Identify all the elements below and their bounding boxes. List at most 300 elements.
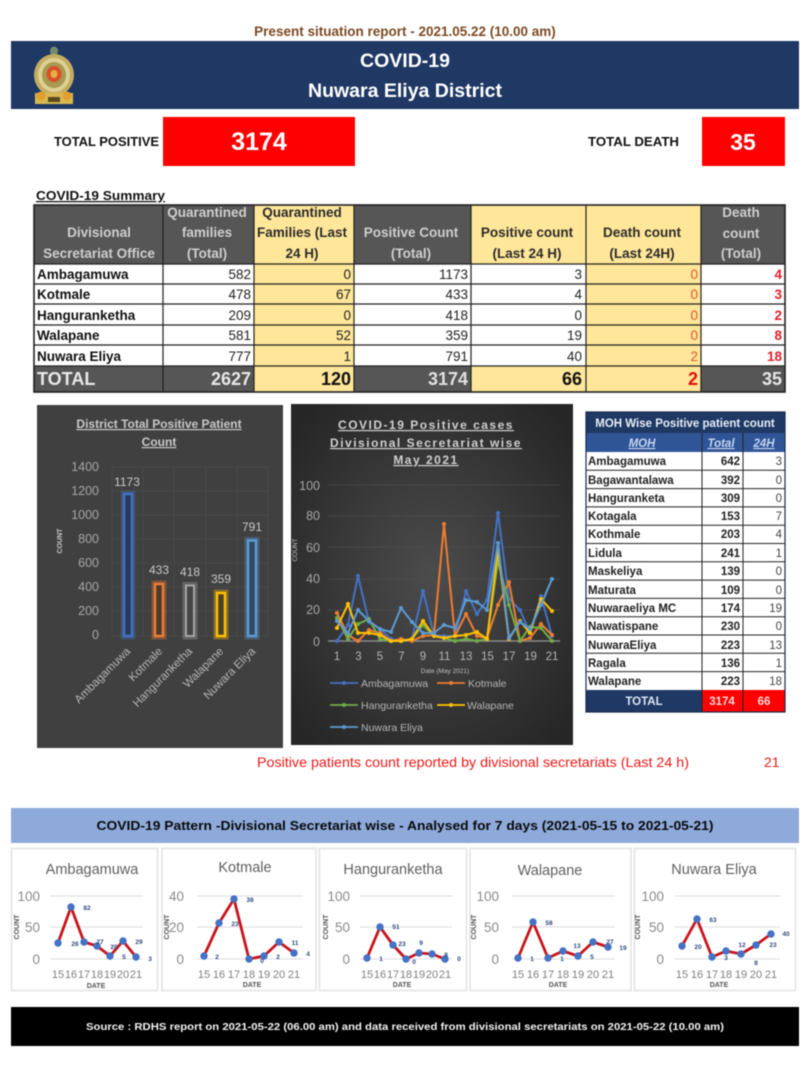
small chart: Kotmale: 2: [276, 954, 280, 961]
panel: MOH table: [586, 412, 785, 712]
chart title: Count: [142, 435, 176, 449]
legend: Hanguranketha: [361, 700, 433, 712]
x axis labels: 19: [524, 651, 537, 663]
MOH rows: Bagawantalawa: [588, 475, 674, 487]
row: Nuwara Eliya: 18: [767, 349, 782, 364]
small chart: Ambagamuwa: COUNT: [14, 914, 21, 939]
panel: divisional line chart: [291, 404, 573, 745]
MOH column headers: MOH: [629, 438, 656, 450]
header row: Death: [722, 205, 760, 220]
header row: [43, 205, 761, 261]
small chart: Kotmale: 38: [246, 897, 254, 904]
small chart: Kotmale: 0: [260, 958, 264, 965]
KPI: total positive: [54, 117, 355, 166]
small chart: Hanguranketha: 19: [413, 969, 425, 981]
row: Ambagamuwa: 0: [343, 267, 351, 282]
row: total: 35: [762, 369, 782, 389]
row: total: 3174: [428, 369, 468, 389]
small chart: Kotmale: 20: [273, 969, 285, 981]
MOH rows: NuwaraEliya: [588, 640, 657, 652]
category labels: Kotmale: [127, 646, 165, 684]
header row: Death count: [603, 225, 681, 240]
section banner: [11, 808, 799, 843]
MOH rows: Lidula: [588, 548, 622, 560]
small chart: Hanguranketha: 8: [444, 952, 448, 959]
header row: (Total): [391, 246, 431, 261]
small chart: Nuwara Eliya: 3: [724, 955, 728, 962]
MOH rows: Nuwaraeliya MC: [588, 603, 676, 615]
y axis title: COUNT: [57, 528, 64, 553]
small chart: Walapane: 21: [602, 969, 614, 981]
MOH column headers: Total: [707, 438, 735, 450]
small chart: Hanguranketha: Hanguranketha: [343, 862, 444, 878]
small chart: Walapane: 58: [545, 920, 553, 927]
small chart: Hanguranketha: [320, 848, 466, 990]
small chart: Walapane: 1: [560, 956, 564, 963]
row: Kotmale: 0: [690, 287, 698, 302]
row: Nuwara Eliya: 40: [567, 349, 582, 364]
small chart: Kotmale: 18: [243, 969, 255, 981]
small chart: Ambagamuwa: [12, 848, 158, 990]
row: Kotmale: 433: [445, 287, 468, 302]
MOH rows: Nawatispane: [588, 621, 658, 633]
small chart: Nuwara Eliya: 100: [641, 889, 664, 904]
small chart: Ambagamuwa: 26: [71, 941, 79, 948]
small chart: Nuwara Eliya: 19: [735, 969, 747, 981]
MOH rows: Maturata: [588, 585, 637, 597]
MOH rows: 174: [721, 603, 741, 615]
small chart: Hanguranketha: 16: [374, 969, 386, 981]
row: total: TOTAL: [37, 369, 95, 389]
MOH rows: Ragala: [588, 658, 626, 670]
header row: (Total): [187, 246, 227, 261]
MOH rows: Ambagamuwa: [588, 456, 667, 468]
MOH rows: 0: [776, 621, 782, 633]
MOH rows: 109: [721, 585, 740, 597]
MOH rows: 223: [721, 640, 740, 652]
report date line: Present situation report - 2021.05.22 (10.00 am): [254, 24, 556, 39]
data labels: 791: [242, 520, 262, 534]
small chart: Ambagamuwa: Ambagamuwa: [46, 862, 139, 878]
fills: [34, 205, 785, 392]
row: Walapane: 52: [336, 328, 351, 343]
small chart: Nuwara Eliya: Nuwara Eliya: [671, 862, 758, 878]
MOH rows: 241: [721, 548, 741, 560]
y axis labels: 20: [306, 603, 320, 617]
MOH rows: 19: [769, 603, 782, 615]
small chart: Kotmale: 20: [169, 920, 184, 935]
small chart: Nuwara Eliya: 12: [738, 942, 746, 949]
row: Hanguranketha: 418: [445, 308, 468, 323]
header row: Positive Count: [364, 225, 459, 240]
MOH rows: 13: [769, 640, 782, 652]
MOH total row: 66: [758, 696, 770, 708]
legend: Nuwara Eliya: [361, 722, 423, 734]
row: Nuwara Eliya: [37, 349, 782, 364]
small chart: Ambagamuwa: 0: [32, 952, 40, 967]
MOH rows: 0: [776, 475, 782, 487]
small chart: Walapane: 16: [527, 969, 539, 981]
small chart: Ambagamuwa: 27: [96, 939, 104, 946]
row: Nuwara Eliya: 777: [228, 349, 251, 364]
row: total: [37, 369, 782, 389]
MOH column headers: [629, 438, 775, 450]
row: Hanguranketha: 2: [774, 308, 782, 323]
MOH rows: 7: [776, 511, 782, 523]
MOH rows: 0: [776, 585, 782, 597]
row: Hanguranketha: 0: [574, 308, 582, 323]
category labels: Ambagamuwa: [73, 645, 134, 706]
legend: Kotmale: [468, 678, 507, 690]
MOH rows: 139: [721, 566, 740, 578]
header banner: [11, 41, 799, 109]
MOH rows: 309: [721, 493, 740, 505]
small chart: Kotmale: Kotmale: [218, 860, 272, 876]
MOH column headers: 24H: [752, 438, 775, 450]
MOH rows: 0: [776, 566, 782, 578]
row: Hanguranketha: [37, 308, 782, 323]
small chart: Ambagamuwa: 3: [148, 956, 152, 963]
small chart: Walapane: [470, 848, 631, 990]
small chart: Hanguranketha: 1: [379, 956, 383, 963]
small chart: Hanguranketha: 17: [387, 969, 399, 981]
legend: Walapane: [467, 700, 514, 712]
header row: Families (Last: [257, 225, 348, 240]
row: Ambagamuwa: 4: [774, 267, 782, 282]
row: Ambagamuwa: 582: [228, 267, 251, 282]
header row: families: [182, 225, 232, 240]
y axis labels: 200: [78, 604, 99, 618]
y axis labels: 400: [78, 580, 99, 594]
small chart: Hanguranketha: 0: [457, 956, 461, 963]
row: Walapane: 8: [774, 328, 782, 343]
small chart: Nuwara Eliya: 17: [706, 969, 718, 981]
MOH rows: Hanguranketa: [588, 493, 665, 505]
chart title: [76, 417, 242, 449]
callout: last 24h count: 21: [764, 754, 780, 770]
small chart: Nuwara Eliya: DATE: [710, 982, 729, 989]
bars: [124, 494, 256, 636]
header row: 24 H): [285, 246, 319, 261]
footer source bar: Source : RDHS report on 2021-05-22 (06.00 am) and data received from divisional secretariats on 2021-05-22 (10.00 am): [86, 1021, 724, 1033]
y axis labels: 60: [306, 541, 320, 555]
header row: (Last 24 H): [492, 246, 562, 261]
MOH rows: 223: [721, 676, 740, 688]
small chart: Hanguranketha: 50: [335, 920, 350, 935]
y axis labels: 1000: [71, 508, 99, 522]
small chart: Nuwara Eliya: COUNT: [635, 914, 642, 939]
header row: count: [723, 226, 760, 241]
y axis labels: 0: [313, 635, 320, 649]
x axis labels: 21: [546, 651, 558, 663]
small chart: Walapane: 0: [491, 952, 499, 967]
MOH rows: 4: [776, 529, 783, 541]
series: Nuwara Eliya: [337, 543, 552, 638]
y axis labels: 600: [78, 556, 99, 570]
small chart: Walapane: 50: [484, 920, 499, 935]
row: Ambagamuwa: 0: [690, 267, 698, 282]
small chart: Walapane: 1: [530, 956, 534, 963]
row: Kotmale: 478: [228, 287, 251, 302]
small chart: Walapane: 27: [606, 939, 614, 946]
small chart: Kotmale: 23: [231, 921, 239, 928]
x axis labels: 3: [355, 651, 362, 663]
y axis title: COUNT: [292, 538, 299, 562]
row: Hanguranketha: 0: [343, 308, 351, 323]
small chart: Kotmale: 11: [292, 940, 299, 947]
MOH rows: 392: [721, 475, 740, 487]
small chart: Walapane: 18: [557, 969, 569, 981]
data labels: 1173: [114, 475, 140, 489]
small chart: Nuwara Eliya: 8: [754, 960, 758, 967]
small chart: Ambagamuwa: 20: [117, 969, 129, 981]
small chart: Hanguranketha: 21: [439, 969, 451, 981]
row: Ambagamuwa: [37, 267, 782, 282]
small chart: Kotmale: 16: [213, 969, 225, 981]
small chart: Hanguranketha: 0: [342, 952, 350, 967]
KPI: total death: [588, 117, 785, 166]
small chart: Hanguranketha: 23: [398, 941, 406, 948]
small chart: Hanguranketha: COUNT: [323, 914, 330, 939]
chart title: COVID-19 Positive cases: [338, 418, 514, 432]
row: Walapane: 0: [690, 328, 698, 343]
KPI: total positive: 3174: [231, 128, 287, 156]
x axis labels: 17: [503, 651, 515, 663]
category labels: Hanguranketha: [131, 645, 196, 710]
MOH total row: [625, 696, 770, 708]
y axis labels: 100: [299, 479, 320, 493]
small chart: Nuwara Eliya: 21: [765, 969, 777, 981]
small chart: Hanguranketha: 20: [426, 969, 438, 981]
header row: Secretariat Office: [43, 246, 155, 261]
x axis labels: [334, 651, 558, 663]
small chart: Ambagamuwa: 19: [104, 969, 116, 981]
header row: (Last 24H): [609, 246, 675, 261]
series: Walapane: [337, 550, 552, 641]
header row: Positive count: [481, 225, 574, 240]
y axis labels: 1400: [71, 460, 99, 474]
small chart: Ambagamuwa: DATE: [87, 983, 106, 990]
y axis labels: [299, 479, 320, 649]
row: Ambagamuwa: Ambagamuwa: [37, 267, 129, 282]
small chart: Ambagamuwa: 29: [135, 939, 143, 946]
header row: Quarantined: [167, 205, 247, 220]
row: Kotmale: Kotmale: [37, 287, 91, 302]
row: total: 66: [562, 369, 582, 389]
category labels: Walapane: [181, 646, 226, 690]
MOH rows: Kotagala: [588, 511, 637, 523]
MOH rows: 230: [721, 621, 740, 633]
MOH rows: 136: [721, 658, 740, 670]
row: Hanguranketha: 209: [228, 308, 251, 323]
small chart: Walapane: 5: [590, 954, 594, 961]
row: Kotmale: 4: [574, 287, 582, 302]
small chart: Ambagamuwa: 17: [78, 969, 90, 981]
grid: [34, 205, 785, 392]
row: Ambagamuwa: 1173: [439, 267, 468, 282]
MOH rows: Maskeliya: [588, 566, 643, 578]
small chart: Walapane: 20: [587, 969, 599, 981]
small chart: Hanguranketha: 15: [361, 969, 373, 981]
row: total: 2: [688, 369, 698, 389]
small chart: Hanguranketha: 100: [327, 889, 350, 904]
small chart: Ambagamuwa: 5: [122, 954, 126, 961]
MOH total row: 3174: [709, 696, 735, 708]
small chart: Kotmale: 0: [176, 952, 184, 967]
data labels: 359: [211, 572, 231, 586]
chart title: May 2021: [393, 453, 459, 467]
x axis labels: 15: [481, 651, 494, 663]
data labels: 433: [149, 563, 169, 577]
row: Walapane: Walapane: [37, 328, 100, 343]
small chart: Nuwara Eliya: 20: [694, 944, 702, 951]
small chart: Hanguranketha: 18: [400, 969, 412, 981]
data labels: 418: [180, 565, 200, 579]
x axis labels: 11: [439, 651, 450, 663]
x axis labels: 7: [398, 651, 405, 663]
small chart: Hanguranketha: DATE: [393, 982, 412, 989]
row: total: 2627: [211, 369, 251, 389]
panel: district total bar chart: [37, 405, 283, 748]
MOH rows: 642: [721, 456, 740, 468]
series: Hanguranketha: [337, 561, 552, 641]
section banner: COVID-19 Pattern -Divisional Secretariat wise - Analysed for 7 days (2021-05-15 to 2021-05-21): [96, 818, 714, 833]
icon: national emblem: [34, 46, 74, 104]
y axis labels: 0: [92, 628, 99, 642]
small chart: Kotmale: [162, 848, 316, 990]
category labels: Nuwara Eliya: [202, 645, 259, 702]
legend: [330, 678, 514, 734]
chart title: Divisional Secretariat wise: [330, 436, 522, 450]
small chart: Nuwara Eliya: 20: [750, 969, 762, 981]
row: Kotmale: [37, 287, 782, 302]
summary table: [34, 205, 785, 392]
small chart: Ambagamuwa: 82: [83, 905, 91, 912]
small chart: Nuwara Eliya: 40: [782, 931, 790, 938]
row: Kotmale: 67: [336, 287, 351, 302]
chart title: District Total Positive Patient: [76, 417, 242, 431]
small chart: Hanguranketha: 0: [412, 959, 416, 966]
y axis labels: 800: [78, 532, 99, 546]
small chart: Nuwara Eliya: 18: [720, 969, 732, 981]
small chart: Kotmale: 21: [288, 969, 300, 981]
y axis labels: [71, 460, 99, 642]
x axis labels: 1: [334, 651, 340, 663]
small chart: Ambagamuwa: 50: [25, 920, 40, 935]
small chart: Walapane: COUNT: [471, 914, 478, 939]
small chart: Nuwara Eliya: 23: [769, 942, 777, 949]
small chart: Ambagamuwa: 100: [17, 889, 40, 904]
row: Nuwara Eliya: Nuwara Eliya: [37, 349, 122, 364]
series: Kotmale: [337, 524, 552, 641]
legend: Ambagamuwa: [361, 678, 428, 690]
row: Hanguranketha: 0: [690, 308, 698, 323]
small chart: Kotmale: COUNT: [164, 914, 171, 939]
small chart: Kotmale: 17: [228, 969, 240, 981]
footer source bar: [11, 1007, 799, 1046]
small chart: Walapane: 15: [512, 969, 524, 981]
small chart: Hanguranketha: 9: [419, 940, 423, 947]
small chart: Kotmale: 4: [306, 951, 310, 958]
header row: Divisional: [67, 225, 131, 240]
row: Walapane: 359: [445, 328, 468, 343]
small chart: Kotmale: DATE: [243, 982, 262, 989]
KPI: total death: TOTAL DEATH: [588, 135, 679, 149]
header row: Quarantined: [262, 205, 342, 220]
MOH rows: 203: [721, 529, 740, 541]
data labels: [114, 475, 262, 586]
MOH total row: TOTAL: [625, 696, 663, 708]
x axis title: Date (May 2021): [421, 668, 469, 675]
small chart: Hanguranketha: 51: [392, 924, 400, 931]
small chart: Walapane: 19: [572, 969, 584, 981]
row: Hanguranketha: Hanguranketha: [37, 308, 136, 323]
chart title: [330, 418, 522, 467]
small chart: Kotmale: 15: [198, 969, 210, 981]
small chart: Kotmale: 40: [169, 889, 184, 904]
small chart: Ambagamuwa: 16: [65, 969, 77, 981]
small chart: Nuwara Eliya: 63: [709, 917, 717, 924]
row: Walapane: 19: [567, 328, 582, 343]
small chart: Kotmale: 2: [215, 954, 219, 961]
header title: COVID-19: [360, 50, 450, 72]
summary heading: COVID-19 Summary: [36, 189, 165, 203]
small chart: Nuwara Eliya: 16: [691, 969, 703, 981]
KPI: total positive: TOTAL POSITIVE: [54, 135, 159, 149]
small chart: Ambagamuwa: 20: [110, 944, 118, 951]
MOH rows: 1: [776, 548, 782, 560]
small chart: Walapane: 100: [476, 889, 499, 904]
MOH rows: 0: [776, 493, 782, 505]
MOH rows: 3: [776, 456, 782, 468]
x axis labels: 5: [377, 651, 383, 663]
small chart: Nuwara Eliya: 50: [649, 920, 664, 935]
row: Nuwara Eliya: 791: [445, 349, 468, 364]
small chart: Ambagamuwa: 18: [91, 969, 103, 981]
MOH rows: 18: [769, 676, 782, 688]
small chart: Walapane: 19: [619, 945, 627, 952]
MOH rows: Kothmale: [588, 529, 640, 541]
small chart: Ambagamuwa: 21: [130, 969, 142, 981]
small chart: Walapane: Walapane: [518, 863, 582, 879]
category labels: [73, 645, 259, 710]
x axis labels: 13: [460, 651, 472, 663]
MOH table title: MOH Wise Positive patient count: [595, 418, 775, 430]
MOH rows: Walapane: [588, 676, 641, 688]
row: Ambagamuwa: 3: [574, 267, 582, 282]
row: Walapane: 581: [228, 328, 251, 343]
small chart: Nuwara Eliya: 15: [676, 969, 688, 981]
y axis labels: 80: [306, 509, 320, 523]
header row: (Total): [721, 246, 761, 261]
row: Nuwara Eliya: 1: [343, 349, 351, 364]
MOH rows: 153: [721, 511, 740, 523]
small chart: Kotmale: 19: [258, 969, 270, 981]
small chart: Walapane: DATE: [549, 982, 568, 989]
MOH rows: 1: [776, 658, 782, 670]
row: Kotmale: 3: [774, 287, 782, 302]
row: Nuwara Eliya: 2: [690, 349, 698, 364]
header subtitle: Nuwara Eliya District: [308, 80, 502, 102]
small chart: Ambagamuwa: 15: [52, 969, 64, 981]
small chart: Walapane: 17: [542, 969, 554, 981]
row: total: 120: [321, 369, 351, 389]
x axis labels: 9: [420, 651, 426, 663]
series: Ambagamuwa: [337, 513, 552, 641]
callout: last 24h count: Positive patients count reported by divisional secretariats (Last 24 h): [257, 754, 689, 770]
KPI: total death: 35: [730, 129, 756, 155]
y axis labels: 40: [306, 572, 320, 586]
